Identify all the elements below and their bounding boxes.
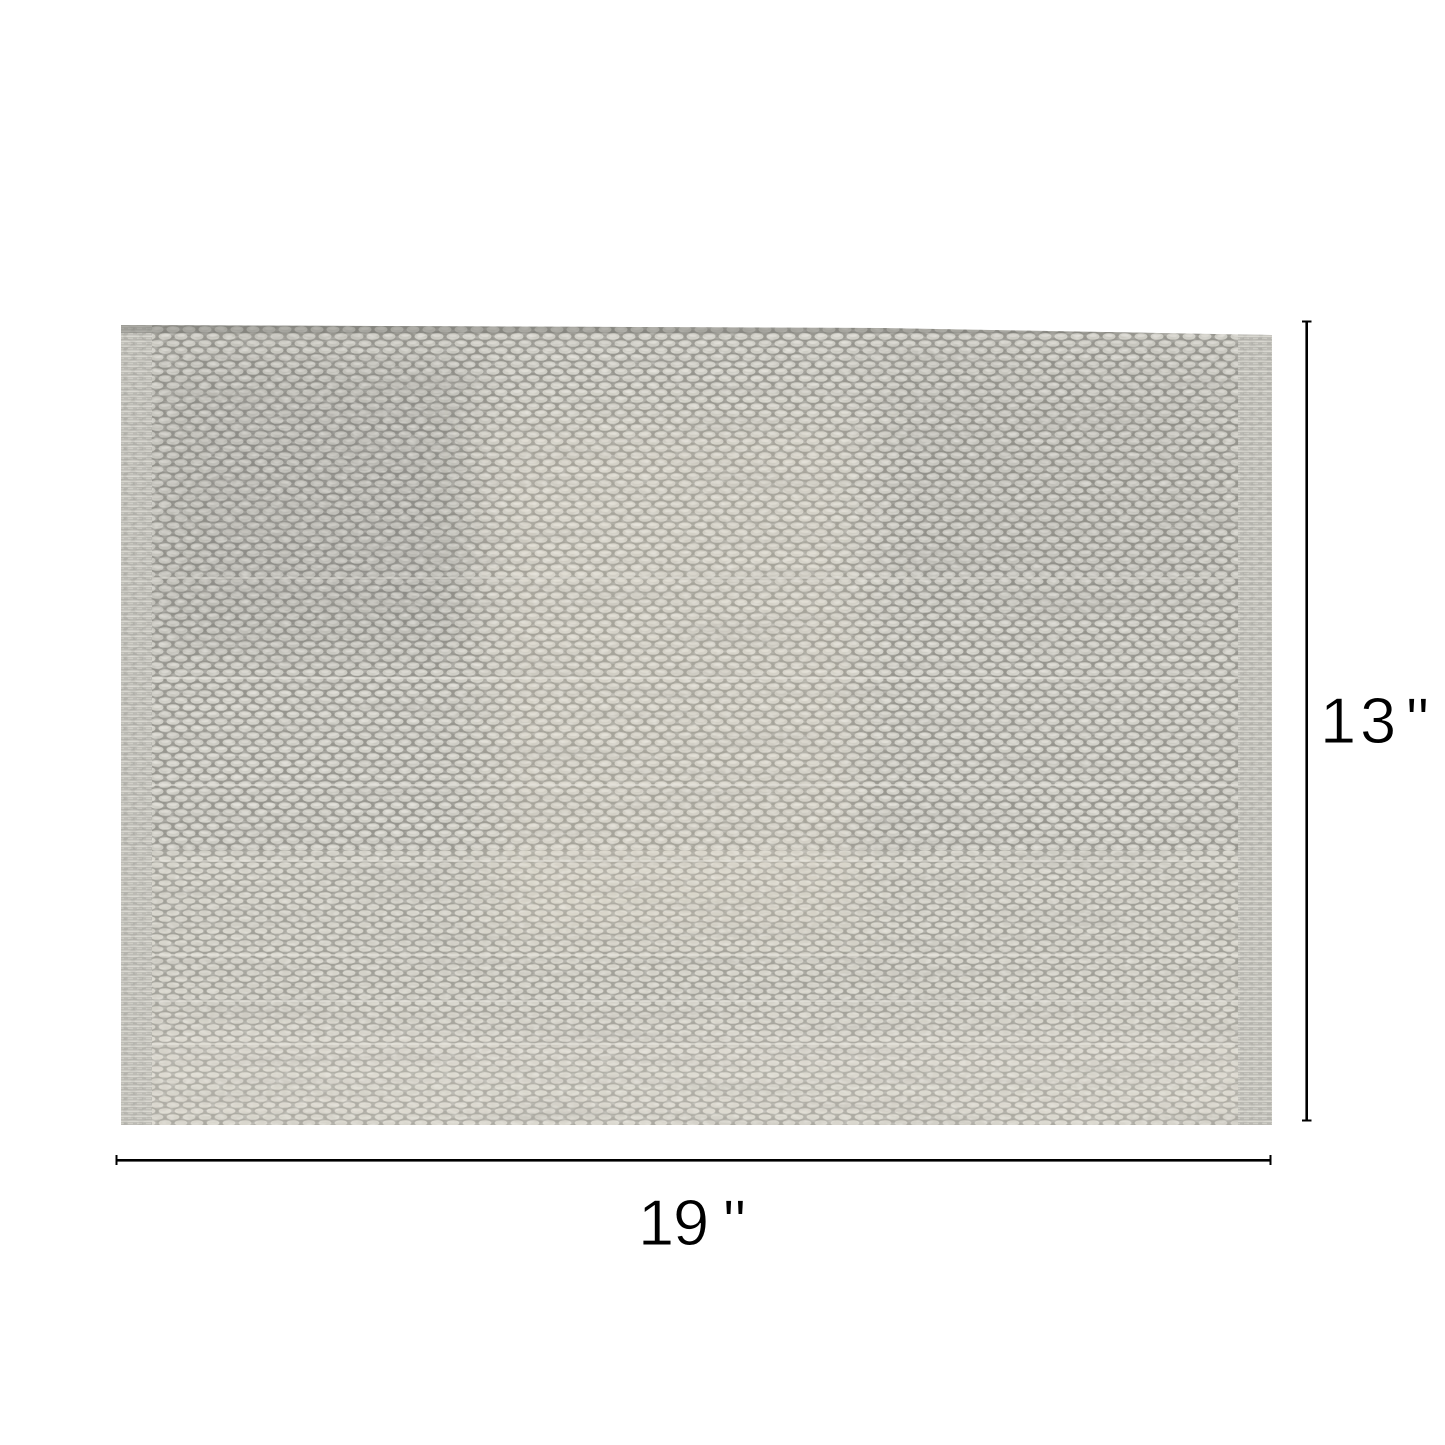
- left selvedge band: [121, 325, 152, 1125]
- label: height 13 inches: 13 ": [1320, 684, 1429, 757]
- dark horizontal streaks: [121, 325, 1272, 1125]
- dark top edge: [121, 325, 1241, 333]
- infographic canvas: [116, 320, 1426, 1245]
- tonal shading patches: [121, 350, 1272, 1130]
- tighter, lighter weave in lower part: [121, 850, 1272, 1125]
- height dimension line: [1302, 320, 1312, 1122]
- placemat: woven rug photo: [121, 325, 1272, 1130]
- woven field: [121, 325, 1272, 850]
- width dimension line: [116, 1155, 1272, 1165]
- light yarn grain: [121, 325, 1272, 1125]
- pale horizontal picks: [150, 577, 1245, 1045]
- label: width 19 inches: 19 ": [638, 1186, 746, 1259]
- right selvedge band: [1238, 325, 1272, 1125]
